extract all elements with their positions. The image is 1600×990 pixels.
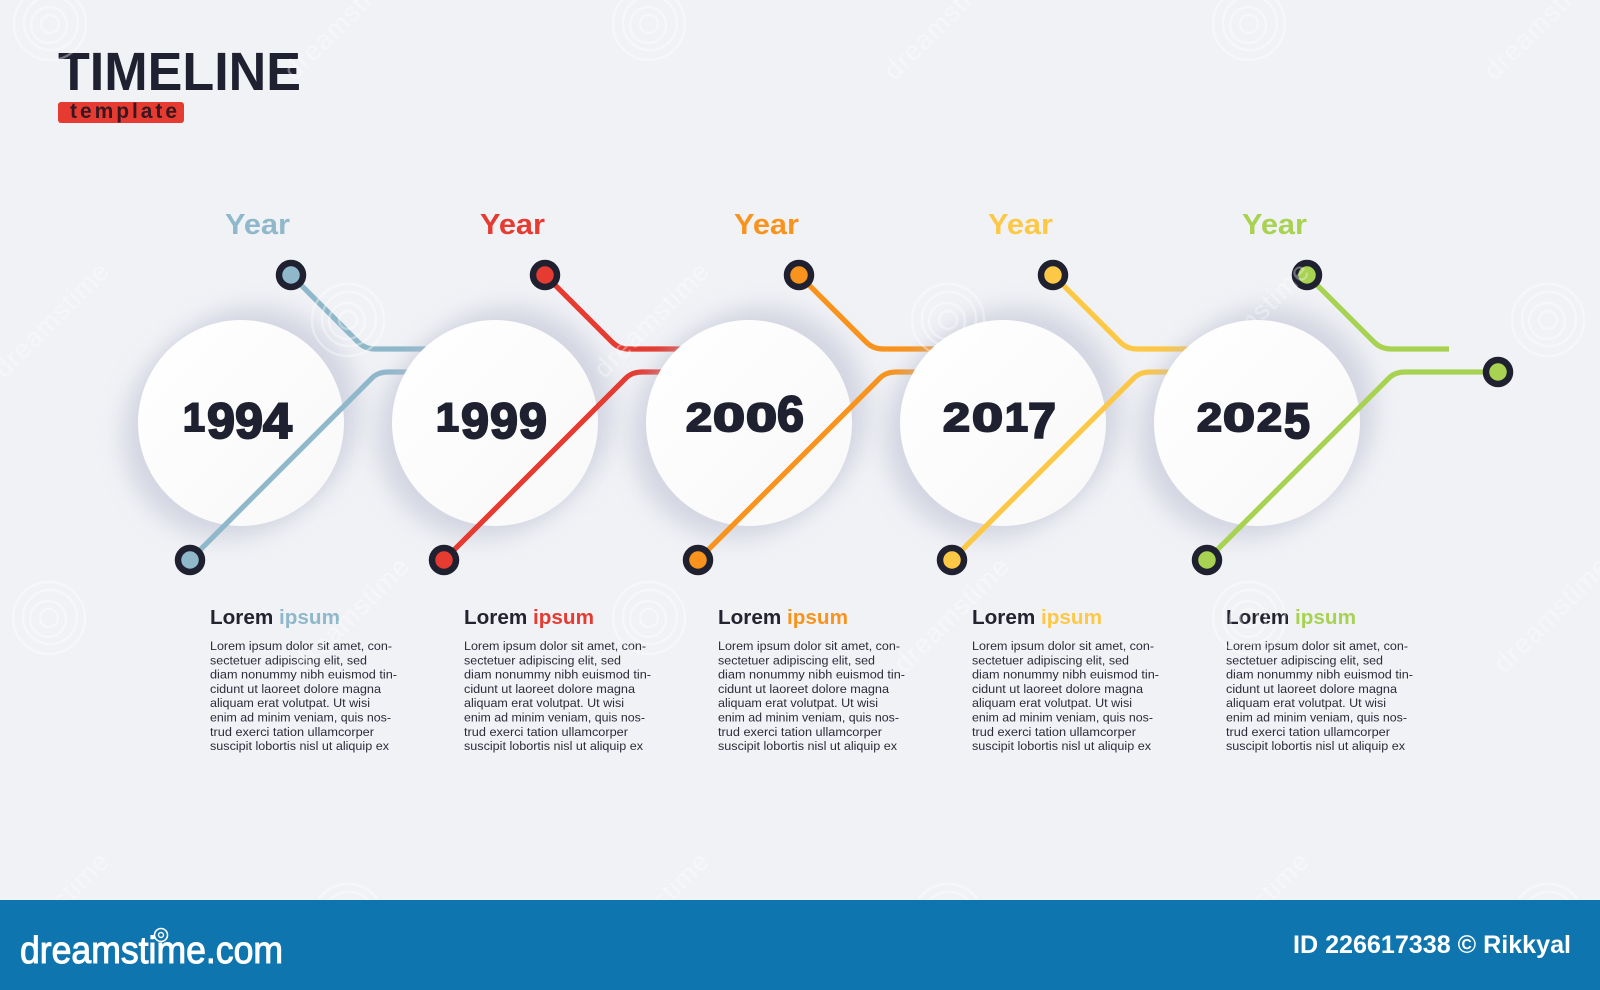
connector lower red <box>444 372 684 560</box>
body 1: sectetuer adipiscing elit, sed <box>210 653 367 667</box>
body 4: suscipit lobortis nisl ut aliquip ex <box>972 739 1152 753</box>
step: 1999 <box>392 209 684 572</box>
node bottom orange <box>686 548 710 572</box>
year number 2025: 5 <box>1284 393 1310 449</box>
body 5: trud exerci tation ullamcorper <box>1226 725 1390 739</box>
body 2: enim ad minim veniam, quis nos- <box>464 710 645 724</box>
node end green <box>1486 360 1510 384</box>
body 4: aliquam erat volutpat. Ut wisi <box>972 696 1132 710</box>
body 4 <box>972 639 1159 753</box>
body 4: cidunt ut laoreet dolore magna <box>972 682 1143 696</box>
year number 2025: 0 <box>1223 396 1255 440</box>
body 5: sectetuer adipiscing elit, sed <box>1226 653 1383 667</box>
connector upper red <box>545 275 684 349</box>
connector upper orange <box>799 275 938 349</box>
body 1: suscipit lobortis nisl ut aliquip ex <box>210 739 390 753</box>
node top yellow <box>1041 263 1065 287</box>
subtitle badge: template <box>70 100 177 123</box>
year number 2017: 7 <box>1028 393 1056 449</box>
year number 2006: 0 <box>746 396 777 440</box>
body 3: suscipit lobortis nisl ut aliquip ex <box>718 739 898 753</box>
body 4: sectetuer adipiscing elit, sed <box>972 653 1129 667</box>
text block 1 <box>210 607 397 753</box>
body 4: Lorem ipsum dolor sit amet, con- <box>972 639 1154 653</box>
body 1: cidunt ut laoreet dolore magna <box>210 682 381 696</box>
heading 2: Lorem ipsum <box>464 607 594 629</box>
year number 1994: 1 <box>183 396 205 440</box>
connector lower green <box>1207 372 1498 560</box>
body 2: aliquam erat volutpat. Ut wisi <box>464 696 624 710</box>
step: 1994 <box>138 209 430 572</box>
year number 1999: 9 <box>490 393 518 449</box>
body 3: trud exerci tation ullamcorper <box>718 725 882 739</box>
year number 1994: 9 <box>235 393 263 449</box>
node bottom blue <box>178 548 202 572</box>
year number 2017: 1 <box>1005 396 1028 440</box>
connector lower yellow <box>952 372 1192 560</box>
year number 1999: 9 <box>461 393 489 449</box>
body 5: cidunt ut laoreet dolore magna <box>1226 682 1397 696</box>
circle 1994 <box>138 320 344 526</box>
circle 2025 <box>1154 320 1360 526</box>
node top orange <box>787 263 811 287</box>
body 5: diam nonummy nibh euismod tin- <box>1226 668 1413 682</box>
body 1: Lorem ipsum dolor sit amet, con- <box>210 639 392 653</box>
heading 1: Lorem ipsum <box>210 607 340 629</box>
footer band <box>0 900 1600 990</box>
label Year blue: Year <box>225 209 290 241</box>
label Year yellow: Year <box>988 209 1053 241</box>
body 4: trud exerci tation ullamcorper <box>972 725 1136 739</box>
watermark pattern: dreamstime <box>1188 846 1316 974</box>
circle 1999 <box>392 320 598 526</box>
node bottom green <box>1195 548 1219 572</box>
body 4: enim ad minim veniam, quis nos- <box>972 710 1153 724</box>
connector upper blue <box>291 275 430 349</box>
body 2: suscipit lobortis nisl ut aliquip ex <box>464 739 644 753</box>
body 5: aliquam erat volutpat. Ut wisi <box>1226 696 1386 710</box>
step: 2017 <box>900 209 1192 572</box>
body 2: sectetuer adipiscing elit, sed <box>464 653 621 667</box>
body 1: diam nonummy nibh euismod tin- <box>210 668 397 682</box>
body 1: trud exerci tation ullamcorper <box>210 725 374 739</box>
step: 2006 <box>646 209 938 572</box>
body 3: enim ad minim veniam, quis nos- <box>718 710 899 724</box>
year number 1994: 9 <box>207 393 235 449</box>
footer logo: dreamstime.com <box>20 930 283 972</box>
body 3: Lorem ipsum dolor sit amet, con- <box>718 639 900 653</box>
year number 1999: 9 <box>519 393 547 449</box>
body 1: aliquam erat volutpat. Ut wisi <box>210 696 370 710</box>
label Year red: Year <box>480 209 545 241</box>
node bottom red <box>432 548 456 572</box>
step: 2025 <box>1154 209 1510 572</box>
heading 5: Lorem ipsum <box>1226 607 1356 629</box>
text block 4 <box>972 607 1159 753</box>
body 5: Lorem ipsum dolor sit amet, con- <box>1226 639 1408 653</box>
heading 3: Lorem ipsum <box>718 607 848 629</box>
watermark pattern: dreamstime <box>888 551 1016 679</box>
title: TIMELINE <box>58 42 301 102</box>
node top red <box>533 263 557 287</box>
text block 2 <box>464 607 651 753</box>
year number 2025: 2 <box>1257 396 1282 440</box>
year number 1994: 4 <box>263 393 292 449</box>
body 5: suscipit lobortis nisl ut aliquip ex <box>1226 739 1406 753</box>
circle 2006 <box>646 320 852 526</box>
year number 2006: 6 <box>777 386 804 442</box>
body 3: aliquam erat volutpat. Ut wisi <box>718 696 878 710</box>
body 3 <box>718 639 905 753</box>
text block 3 <box>718 607 905 753</box>
body 1: enim ad minim veniam, quis nos- <box>210 710 391 724</box>
watermark pattern: dreamstime <box>288 551 416 679</box>
body 5 <box>1226 639 1413 753</box>
text block 5 <box>1226 607 1413 753</box>
node top green <box>1295 263 1319 287</box>
footer credit: ID 226617338 © Rikkyal <box>1293 931 1571 959</box>
heading 4: Lorem ipsum <box>972 607 1102 629</box>
year number 1999: 1 <box>436 396 459 440</box>
watermark pattern: dreamstime <box>588 846 716 974</box>
body 3: diam nonummy nibh euismod tin- <box>718 668 905 682</box>
year number 2025: 2 <box>1197 396 1222 440</box>
body 2: trud exerci tation ullamcorper <box>464 725 628 739</box>
body 1 <box>210 639 397 753</box>
body 3: cidunt ut laoreet dolore magna <box>718 682 889 696</box>
body 3: sectetuer adipiscing elit, sed <box>718 653 875 667</box>
body 5: enim ad minim veniam, quis nos- <box>1226 710 1407 724</box>
body 4: diam nonummy nibh euismod tin- <box>972 668 1159 682</box>
node bottom yellow <box>940 548 964 572</box>
body 2 <box>464 639 651 753</box>
node top blue <box>279 263 303 287</box>
year number 2006: 0 <box>713 396 745 440</box>
connector lower orange <box>698 372 938 560</box>
body 2: Lorem ipsum dolor sit amet, con- <box>464 639 646 653</box>
connector lower blue <box>190 372 430 560</box>
watermark pattern: dreamstime <box>1188 256 1316 384</box>
label Year green: Year <box>1242 209 1307 241</box>
body 2: cidunt ut laoreet dolore magna <box>464 682 635 696</box>
circle 2017 <box>900 320 1106 526</box>
year number 2017: 0 <box>972 396 1003 440</box>
connector upper yellow <box>1053 275 1192 349</box>
label Year orange: Year <box>734 209 799 241</box>
connector upper green <box>1307 275 1449 349</box>
watermark pattern: dreamstime <box>588 256 716 384</box>
body 2: diam nonummy nibh euismod tin- <box>464 668 651 682</box>
year number 2017: 2 <box>943 396 970 440</box>
year number 2006: 2 <box>686 396 712 440</box>
